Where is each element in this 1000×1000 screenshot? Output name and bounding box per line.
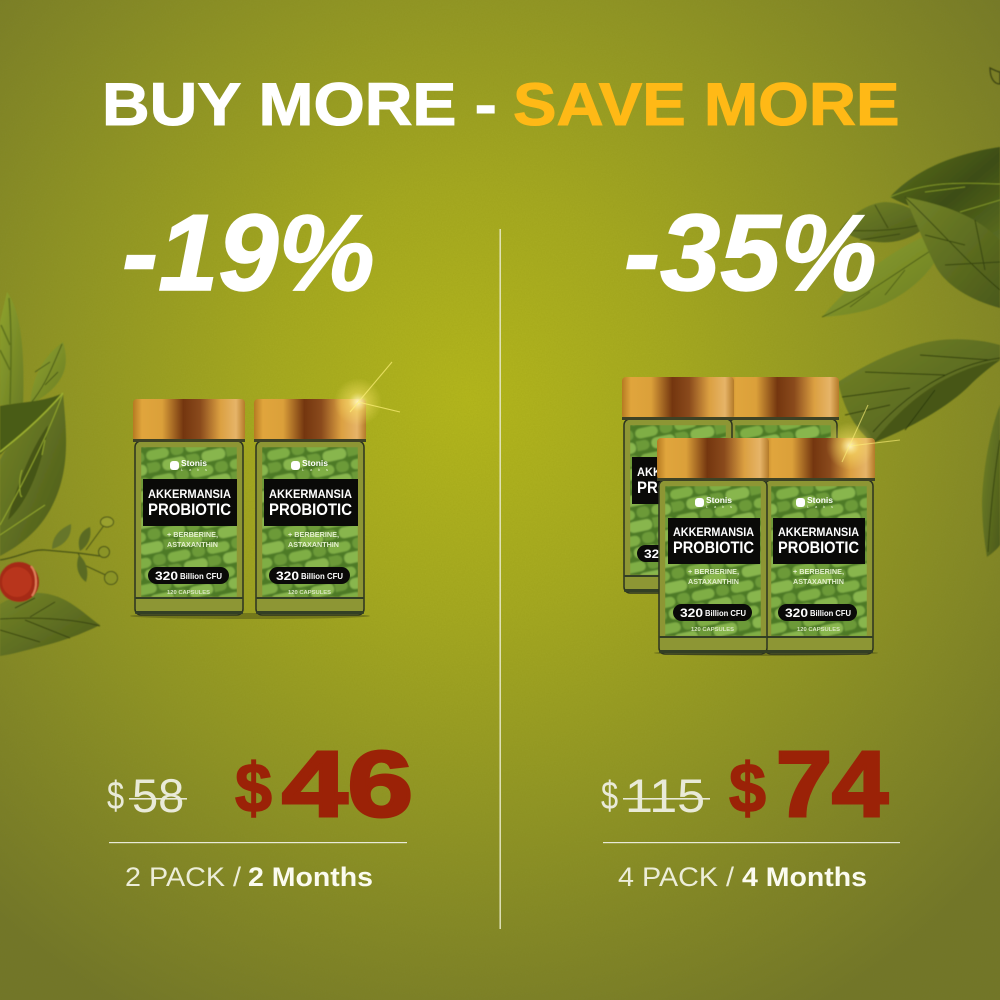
bottle front left: 320	[680, 606, 703, 620]
new price: $46: $	[235, 749, 272, 827]
pack label: 2 pack	[125, 862, 373, 892]
icon: red berry	[0, 562, 39, 602]
bottle 1 of 2: ASTAXANTHIN	[167, 542, 218, 549]
title	[102, 71, 900, 138]
bottle front right: Labs	[807, 504, 833, 509]
icon: light flare	[826, 405, 900, 470]
bottle 2 of 2: 320	[276, 569, 299, 583]
pack label: 4 pack	[618, 862, 867, 892]
bottle front right: Stonis	[807, 496, 834, 505]
bottle front right: 320	[785, 606, 808, 620]
bottle front right: AKKERMANSIA	[778, 527, 859, 539]
bottle 1 of 2: + BERBERINE,	[167, 532, 218, 539]
bottle 1 of 2: AKKERMANSIA	[148, 489, 231, 501]
old price: $58	[107, 769, 187, 822]
pack label: 4 pack: 4 PACK /	[618, 862, 735, 892]
bottle back left	[622, 377, 734, 593]
bottle front right: Billion CFU	[810, 609, 851, 618]
bottle 1 of 2: 120 CAPSULES	[167, 590, 210, 596]
pack label: 2 pack: 2 PACK /	[125, 862, 242, 892]
bottle 2 of 2: PROBIOTIC	[269, 500, 352, 519]
bottle front left: Stonis	[706, 496, 733, 505]
bottle 2 of 2: 120 CAPSULES	[288, 590, 331, 596]
bottle front left: + BERBERINE,	[688, 569, 739, 576]
bottle back left: 320	[644, 547, 667, 561]
bottle 1 of 2: Stonis	[181, 459, 208, 468]
old price: $115: 115	[625, 770, 705, 823]
bottle 2 of 2: Stonis	[302, 459, 329, 468]
bottle front left: Billion CFU	[705, 609, 746, 618]
right botanical decoration	[822, 68, 1000, 557]
bottle 2 of 2: Labs	[302, 467, 328, 472]
old price: $115: $	[601, 773, 618, 818]
product: 2 pack bottles	[130, 362, 400, 619]
pack label: 2 pack: 2 Months	[248, 862, 373, 892]
bottle front left: AKKERMANSIA	[673, 527, 754, 539]
left botanical decoration	[0, 292, 118, 656]
bottle front right: PROBIOTIC	[778, 538, 859, 557]
bottle back left: PROBIOTIC	[637, 478, 720, 497]
bottle 1 of 2: 320	[155, 569, 178, 583]
pack label: 4 pack: 4 Months	[742, 862, 867, 892]
bottle front left: ASTAXANTHIN	[688, 579, 739, 586]
bottle back left: AKKERMANSIA	[637, 467, 720, 479]
bottle 2 of 2: ASTAXANTHIN	[288, 542, 339, 549]
bottle front left: 120 CAPSULES	[691, 627, 734, 633]
product: 4 pack bottles	[622, 377, 900, 656]
bottle 2 of 2	[254, 399, 366, 615]
right rule	[603, 842, 900, 843]
bottle 1 of 2: Billion CFU	[180, 572, 222, 581]
title: SAVE MORE	[513, 71, 900, 138]
bottle 1 of 2: Labs	[181, 467, 207, 472]
bottle 1 of 2	[133, 399, 245, 615]
title: BUY MORE -	[102, 72, 497, 138]
bottle front left	[657, 438, 769, 654]
bottle 2 of 2: Billion CFU	[301, 572, 343, 581]
discount: -19%: -19%	[122, 192, 375, 313]
icon: light flare	[334, 362, 400, 426]
bottle front right	[763, 438, 875, 654]
new price: $74: 74	[776, 732, 888, 836]
center divider	[500, 229, 501, 929]
bottle 2 of 2: AKKERMANSIA	[269, 489, 352, 501]
bottle 2 of 2: + BERBERINE,	[288, 532, 339, 539]
new price: $46: 46	[282, 733, 413, 836]
bottle front right: 120 CAPSULES	[797, 627, 840, 633]
discount: -35%: -35%	[624, 192, 877, 313]
bottle front right: ASTAXANTHIN	[793, 579, 844, 586]
old price: $58: 58	[132, 769, 184, 822]
old price: $58: $	[107, 773, 124, 818]
bottle back right	[727, 377, 839, 593]
left rule	[109, 842, 407, 843]
bottle front left: Labs	[706, 504, 732, 509]
bottle 1 of 2: PROBIOTIC	[148, 500, 231, 519]
bottle front right: + BERBERINE,	[793, 569, 844, 576]
new price: $74: $	[729, 749, 766, 827]
bottle front left: PROBIOTIC	[673, 538, 754, 557]
